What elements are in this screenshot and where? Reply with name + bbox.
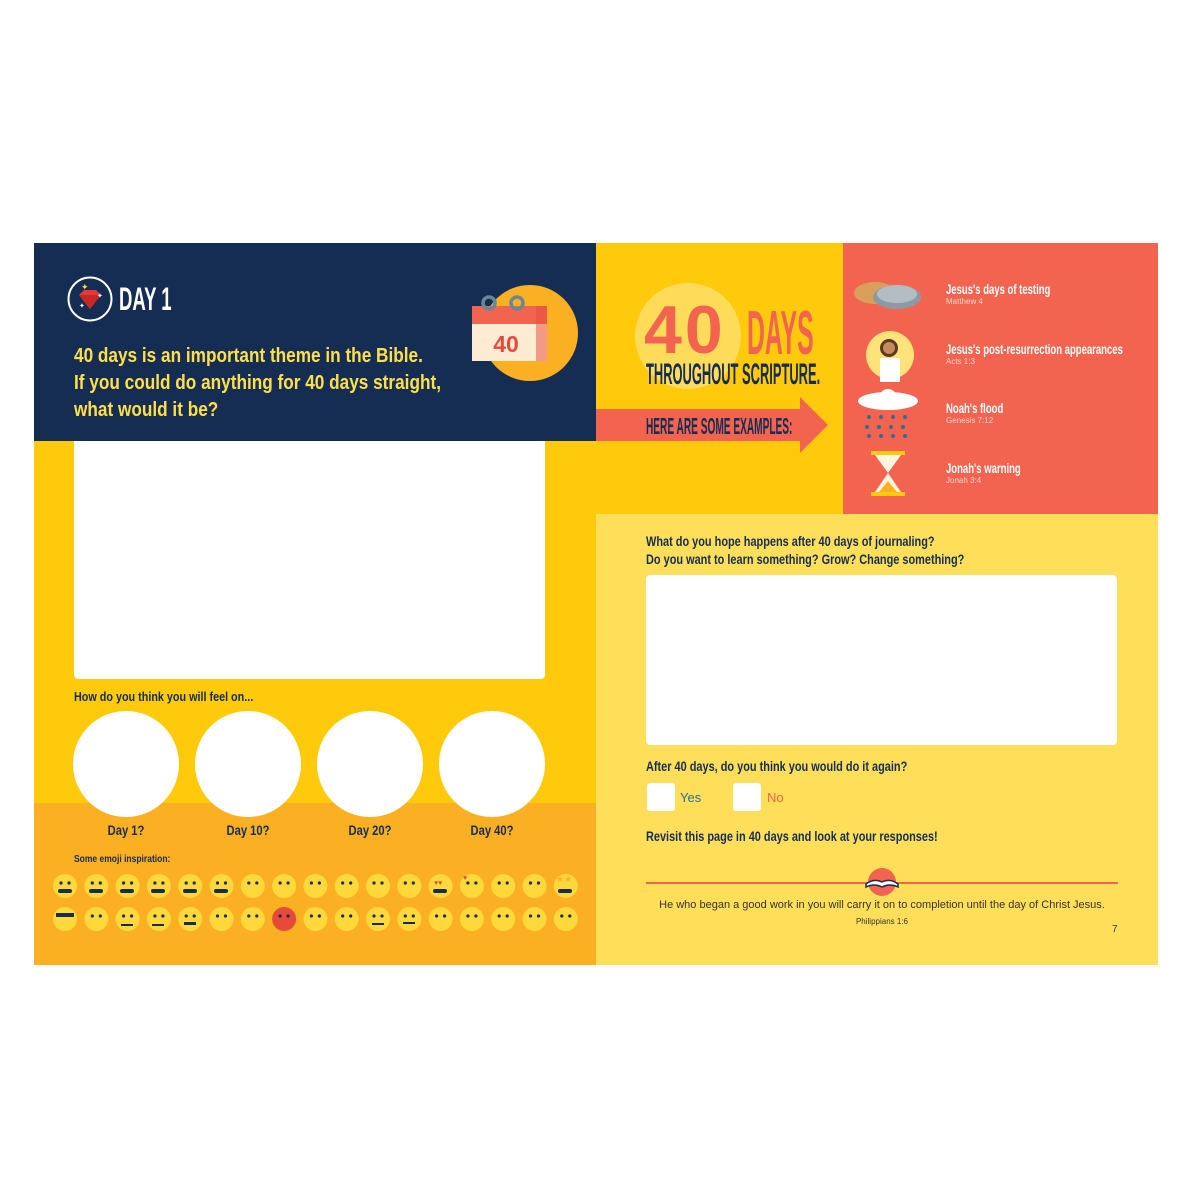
icon: gem: ✦ [81,282,89,292]
answer box left [74,441,545,679]
icon: calendar 40: 40 [493,331,519,357]
heading: 40 DAYS: 40 [644,292,726,368]
page number: 7 [1112,924,1118,935]
page left: background [34,243,596,965]
item 2: Acts 1:3 [946,357,975,366]
item 3 [946,400,1003,425]
text: examples: HERE ARE SOME EXAMPLES: [646,413,792,439]
circles: feelings [73,711,545,838]
emoji grid: ♥ [463,875,467,882]
checkbox yes: Yes [680,790,701,805]
text: question: what would it be? [74,399,218,421]
icon: gem: ✦ [79,302,85,310]
emoji grid: ♥♥ [434,880,442,887]
icon: gem [68,276,112,322]
panel: navy header [34,243,596,441]
text: verse: He who began a good work in you will carry it on to completion until the day of Christ Jesus. [659,899,1105,911]
panel: right yellow top: DAYS [747,299,814,368]
text: question [74,345,441,421]
icon: hourglass [871,451,905,496]
item 2: Jesus's post-resurrection appearances [946,341,1123,357]
item 4 [946,460,1021,485]
circles: feelings: Day 20? [349,823,391,838]
arrow: examples [596,397,828,453]
checkbox no: No [767,790,784,805]
item 3: Noah's flood [946,400,1003,416]
text: reference: Philippians 1:6 [856,917,908,926]
panel: coral examples [843,243,1158,514]
item 1 [946,281,1050,306]
panel: right yellow top [596,243,843,514]
item 4: Jonah 3:4 [946,476,981,485]
item 1: Jesus's days of testing [946,281,1050,297]
checkbox yes [647,783,701,811]
icon: calendar 40 [472,285,578,381]
text: question: If you could do anything for 40 days straight, [74,372,441,394]
item 3: Genesis 7:12 [946,416,993,425]
text: emoji inspiration: Some emoji inspiration: [74,854,170,865]
circles: feelings: Day 1? [108,823,144,838]
answer box right [646,575,1117,745]
item 1: Matthew 4 [946,297,983,306]
text: hope question: What do you hope happens after 40 days of journaling? [646,534,935,549]
emoji grid [53,874,578,931]
icon: cloud rain [858,389,918,438]
icon: jesus [866,331,914,382]
panel: orange band [34,803,596,965]
text: question: 40 days is an important theme in the Bible. [74,345,423,367]
text: again question: After 40 days, do you think you would do it again? [646,759,907,774]
text: revisit: Revisit this page in 40 days and look at your responses! [646,829,938,844]
emoji grid: ★★ [556,874,572,884]
heading: throughout scripture: THROUGHOUT SCRIPTURE. [646,358,820,391]
text: hope question [646,534,964,567]
text: feel prompt: How do you think you will feel on... [74,689,253,704]
icon: bread and stone [854,282,921,309]
icon: gem: ✦ [97,292,103,300]
text: hope question: Do you want to learn something? Grow? Change something? [646,552,964,567]
circles: feelings: Day 40? [471,823,513,838]
heading: DAY 1: DAY 1 [119,281,172,317]
checkbox no [733,783,784,811]
circles: feelings: Day 10? [227,823,269,838]
decorative circle [635,283,741,389]
item 2 [946,341,1123,366]
panel: right lower [596,514,1158,965]
item 4: Jonah's warning [946,460,1021,476]
divider with book [646,868,1118,896]
